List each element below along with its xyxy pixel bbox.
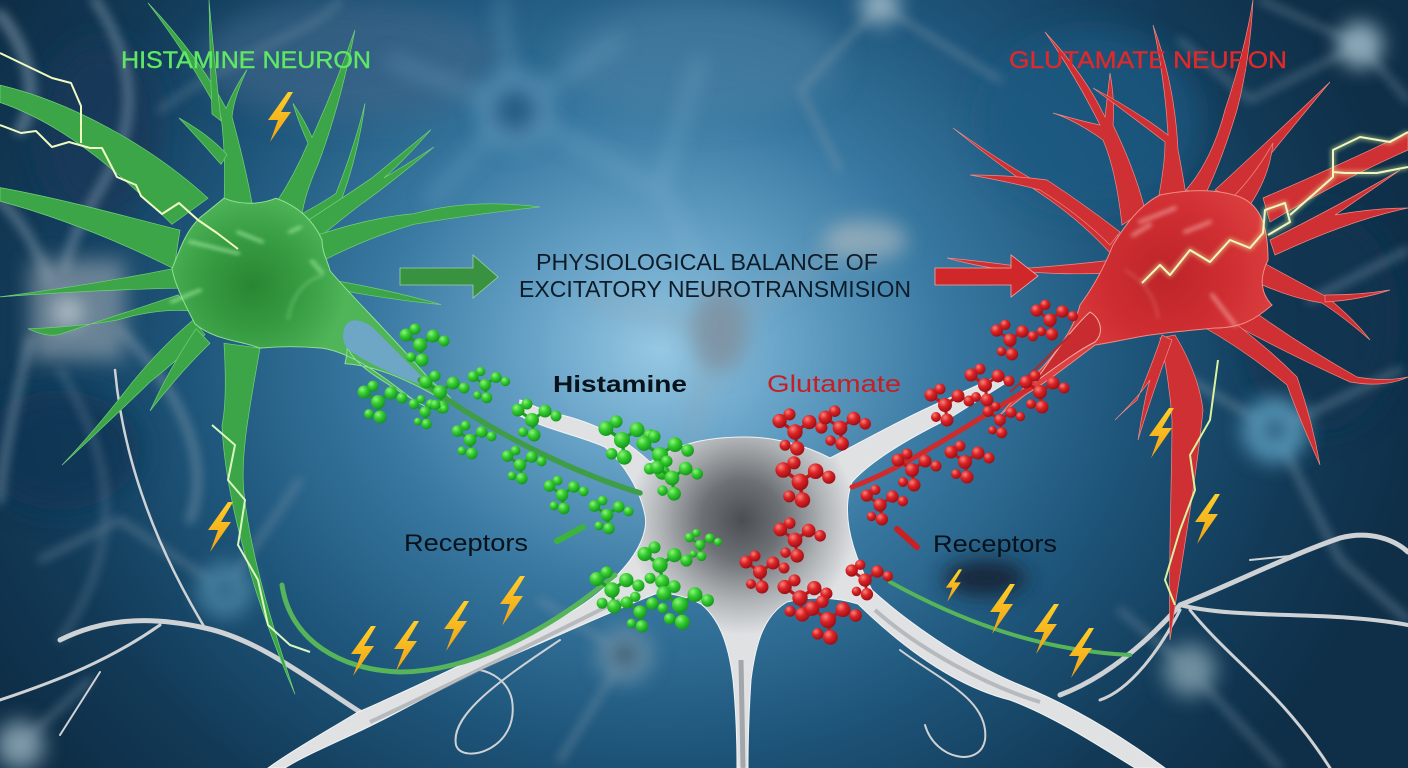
grey branches: left xyxy=(0,370,560,754)
central grey neuron xyxy=(0,370,1408,768)
histamine neuron xyxy=(0,0,1130,694)
green molecules xyxy=(358,324,722,632)
electrical impulses xyxy=(0,53,1408,652)
impulse: red neuron lower xyxy=(1165,360,1218,605)
impulse: glow xyxy=(1142,132,1408,283)
green neuron body xyxy=(0,0,540,694)
axon hole xyxy=(343,320,434,389)
heading: balance of excitatory neurotransmission: EXCITATORY NEUROTRANSMISION xyxy=(519,276,911,302)
title: glutamate neuron: GLUTAMATE NEURON xyxy=(1009,47,1287,74)
heading: balance of excitatory neurotransmission: PHYSIOLOGICAL BALANCE OF xyxy=(536,249,878,275)
dark corners xyxy=(0,0,1400,510)
red fibre xyxy=(852,388,1030,487)
impulse: red neuron xyxy=(1142,132,1408,283)
arrow: green xyxy=(400,255,498,298)
grey branches: right xyxy=(900,535,1408,768)
label: glutamate: Glutamate xyxy=(767,371,901,398)
label: left receptors: Receptors xyxy=(404,530,528,557)
soma highlights xyxy=(172,227,322,319)
green soma xyxy=(172,198,452,406)
red molecules xyxy=(740,300,1078,645)
glutamate neuron xyxy=(852,0,1408,640)
impulse: green neuron lower xyxy=(212,425,310,652)
grey soma and arms xyxy=(268,375,1165,768)
green dendrites xyxy=(0,0,540,694)
label: right receptors: Receptors xyxy=(933,531,1057,558)
red axon hole xyxy=(1035,312,1100,382)
lightning bolts xyxy=(208,92,1220,678)
title: histamine neuron: HISTAMINE NEURON xyxy=(121,47,371,74)
arrow: red xyxy=(935,255,1038,297)
green fibre xyxy=(420,380,640,493)
stem shading xyxy=(741,660,743,768)
impulse: green neuron upper xyxy=(0,53,238,249)
lower green fibre xyxy=(282,575,615,672)
label: histamine: Histamine xyxy=(553,371,687,397)
red soma xyxy=(1000,191,1272,415)
red soma highlights xyxy=(1125,208,1235,325)
